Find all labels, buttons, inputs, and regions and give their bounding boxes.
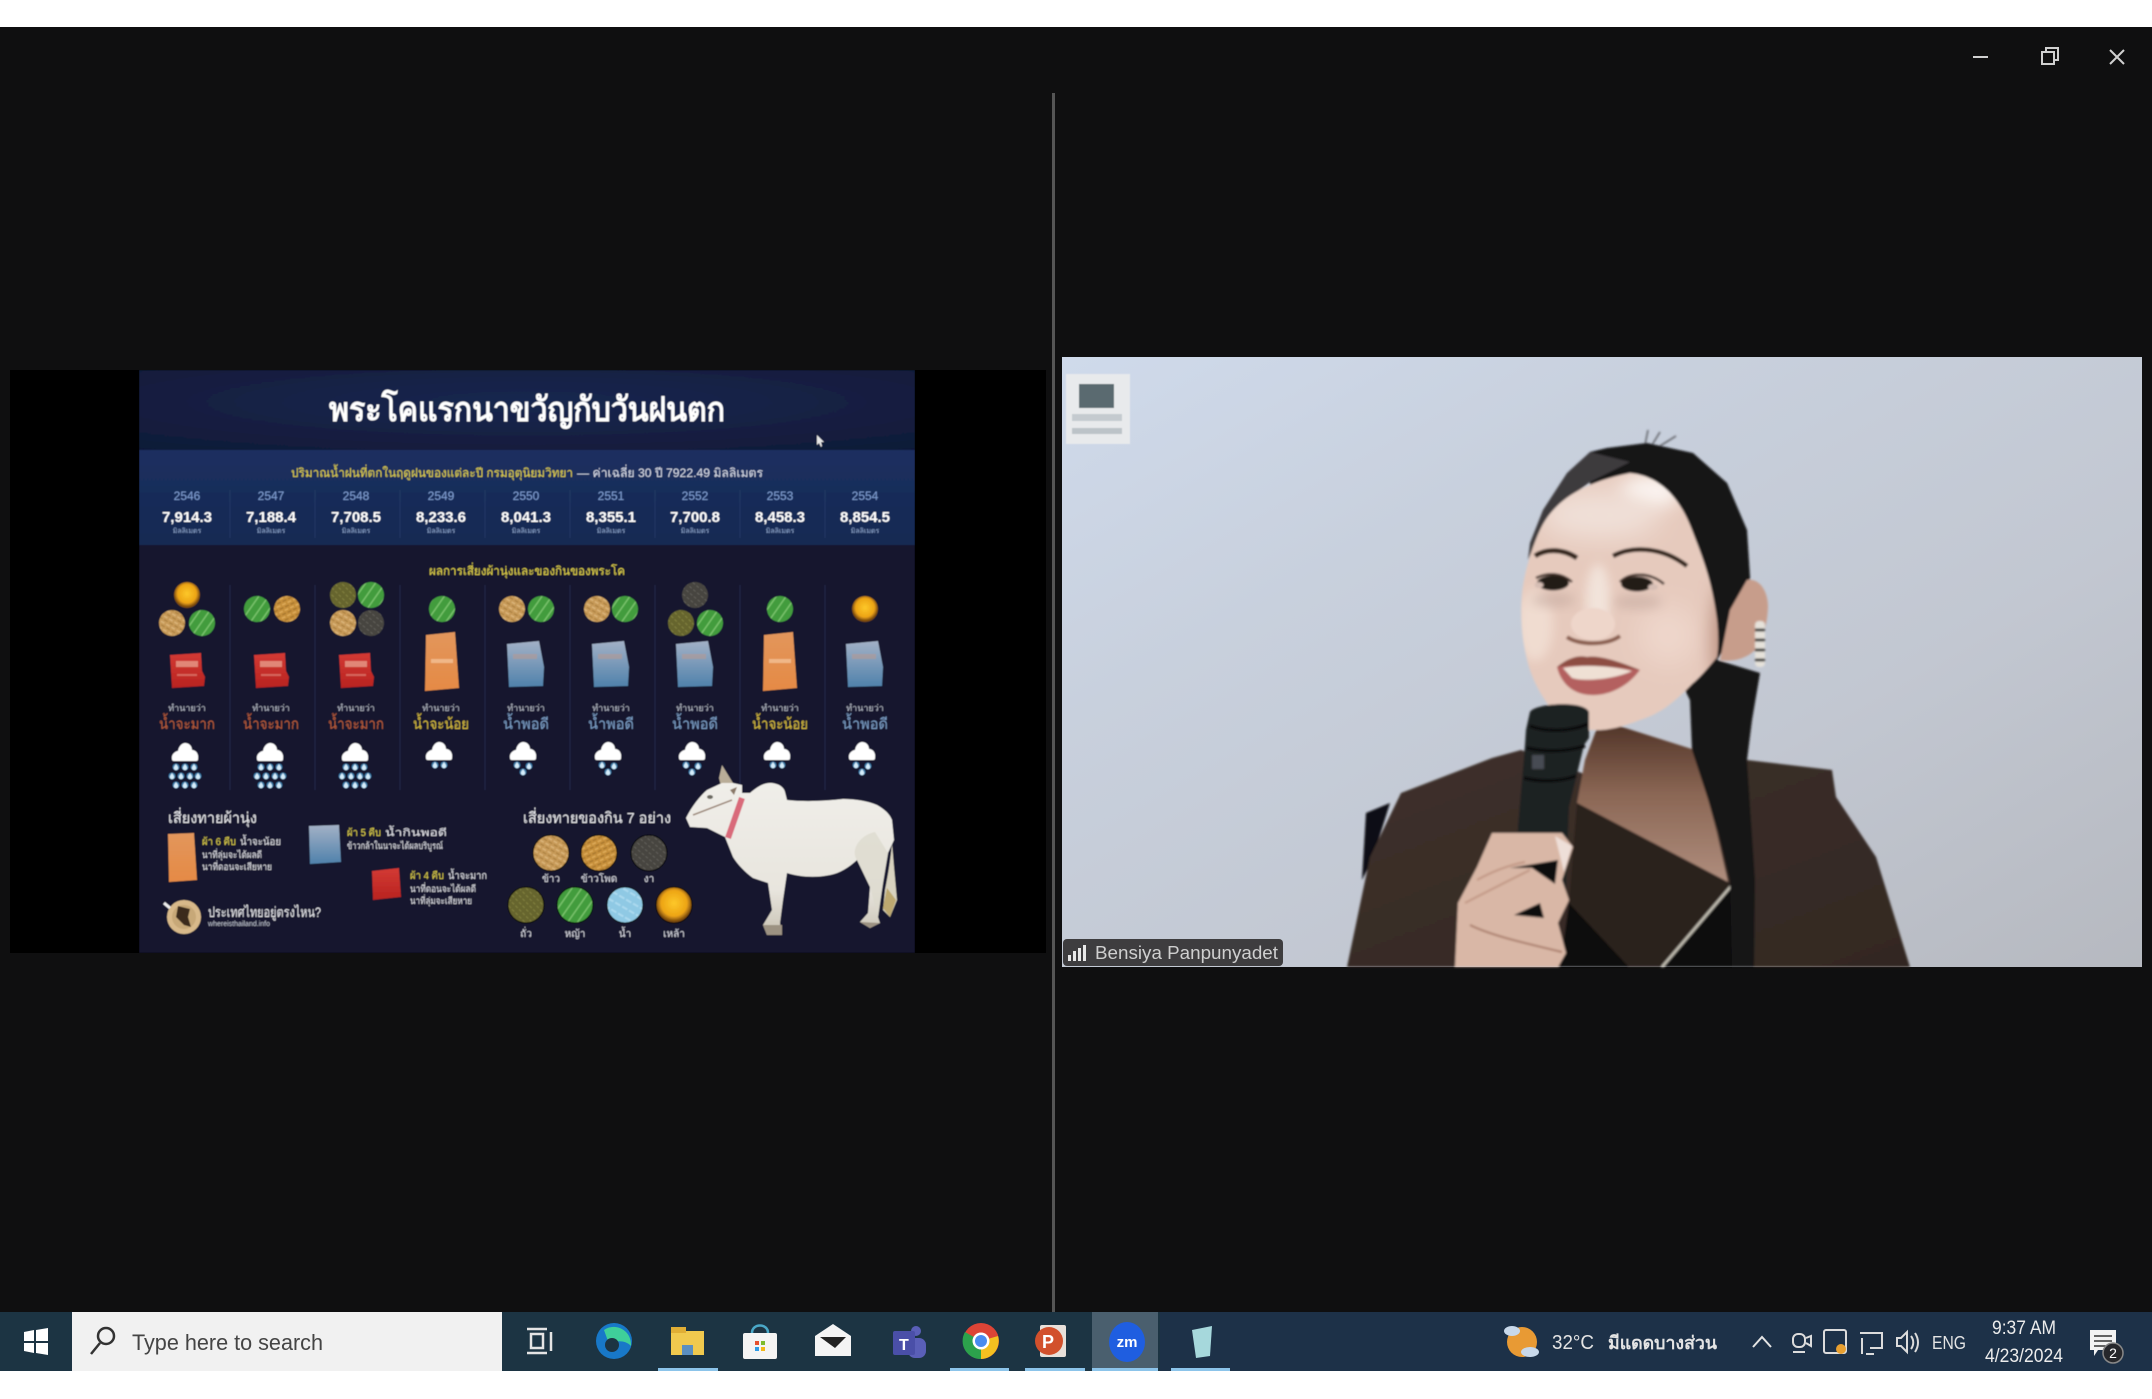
title: พระโคแรกนาขวัญกับวันฝนตก <box>329 389 725 430</box>
2547 foods <box>244 596 300 622</box>
search icon <box>91 1328 114 1354</box>
cloth legend heading: เสี่ยงทายผ้านุ่ง <box>168 807 257 828</box>
signal bars icon <box>1068 945 1086 961</box>
rainfall values row: 8,233.6 <box>416 509 466 526</box>
food legend <box>508 807 692 940</box>
food labels: น้ำ <box>619 926 631 940</box>
shared slide black letterbox <box>10 370 1046 953</box>
2548 foods <box>330 582 384 636</box>
rainfall values row: 8,854.5 <box>840 509 890 526</box>
panel: infographic slide <box>139 370 915 953</box>
food labels: หญ้า <box>565 928 585 940</box>
prediction caption row <box>168 703 884 713</box>
mouth <box>1557 656 1640 695</box>
chrome icon <box>963 1323 999 1359</box>
cloth icons row <box>170 632 883 691</box>
rainfall values row: 8,458.3 <box>755 509 805 526</box>
years row: 2548 <box>343 489 370 503</box>
store icon <box>743 1326 777 1359</box>
running app underlines <box>658 1368 1230 1371</box>
windows taskbar <box>0 1312 2152 1371</box>
legend cloth 6 <box>168 833 281 882</box>
2551 foods <box>584 596 638 622</box>
prediction result row: น้ำพอดี <box>503 713 549 733</box>
yearly rainfall table <box>162 489 890 535</box>
legend cloth 6: น้ำจะน้อย <box>240 834 281 848</box>
unit row: มิลลิเมตร <box>173 527 201 535</box>
hair top and ponytail <box>1590 443 1760 967</box>
rainfall values row: 8,355.1 <box>586 509 636 526</box>
heavy rain 2547 <box>254 743 286 788</box>
unit row: มิลลิเมตร <box>766 527 794 535</box>
centre divider <box>1052 93 1055 1312</box>
zoom icon: zm <box>1117 1334 1137 1351</box>
prediction result row: น้ำจะมาก <box>328 713 384 733</box>
prediction caption row: ทำนายว่า <box>252 703 290 713</box>
taskbar background <box>0 1312 2152 1371</box>
start button <box>24 1328 48 1355</box>
woman presenter <box>1347 430 1910 967</box>
prediction result row: น้ำจะน้อย <box>752 713 808 733</box>
years row: 2551 <box>598 489 625 503</box>
legend cloth 5 <box>309 825 447 864</box>
zoom active highlight <box>1092 1312 1158 1371</box>
logo url: whereisthailand.info <box>207 921 270 928</box>
panel: speaker video <box>1062 357 2142 967</box>
years row: 2552 <box>682 489 709 503</box>
logo: where is Thailand <box>164 900 321 934</box>
weather text: 32°C <box>1552 1332 1594 1354</box>
ear <box>1720 580 1768 661</box>
legend cloth 4: น้ำจะมาก <box>448 868 487 882</box>
2550 foods <box>499 596 554 622</box>
cloth legend <box>168 807 487 907</box>
results heading: ผลการเสี่ยงผ้านุ่งและของกินของพระโค <box>429 562 625 579</box>
2552 foods <box>668 582 723 636</box>
food labels: ข้าว <box>542 873 560 885</box>
unit row <box>173 527 879 535</box>
unit row: มิลลิเมตร <box>342 527 370 535</box>
years row: 2554 <box>852 489 879 503</box>
food labels: เหล้า <box>663 928 685 940</box>
zipper <box>1662 885 1732 967</box>
participant name: Bensiya Panpunyadet <box>1095 943 1278 963</box>
food labels: งา <box>644 874 654 885</box>
food legend heading: เสี่ยงทายของกิน 7 อย่าง <box>523 807 671 827</box>
unit row: มิลลิเมตร <box>427 527 455 535</box>
rainfall values row: 7,700.8 <box>670 509 720 526</box>
years row: 2549 <box>428 489 455 503</box>
unit row: มิลลิเมตร <box>681 527 709 535</box>
legend cloth 4: ผ้า 4 คืบ <box>410 870 444 882</box>
rainfall subtitle: ปริมาณน้ำฝนที่ตกในฤดูฝนของแต่ละปี กรมอุตุนิยมวิทยา <box>291 464 573 481</box>
prediction caption row: ทำนายว่า <box>761 703 799 713</box>
legend cloth 6: นาที่ดอนจะเสียหาย <box>202 860 272 873</box>
2554 foods <box>852 596 878 622</box>
sheer left fringe <box>1528 452 1630 560</box>
prediction result row: น้ำพอดี <box>842 713 888 733</box>
wall background <box>1062 357 2142 967</box>
rain icons row <box>169 742 875 788</box>
prediction result row: น้ำจะมาก <box>159 713 215 733</box>
prediction result row: น้ำจะมาก <box>243 713 299 733</box>
prediction caption row: ทำนายว่า <box>592 703 630 713</box>
nose <box>1567 608 1620 643</box>
earring <box>1755 621 1765 667</box>
light rain 2553 <box>764 742 790 768</box>
moderate rain 2552 <box>679 742 705 775</box>
food coins <box>508 835 692 923</box>
food labels: ถั่ว <box>520 926 532 940</box>
dress <box>1347 750 1910 967</box>
dark underlayer <box>1560 885 1732 967</box>
moderate rain 2550 <box>510 742 536 775</box>
prediction caption row: ทำนายว่า <box>337 703 375 713</box>
mouse cursor <box>817 435 824 447</box>
slide background <box>139 370 915 953</box>
crystal app icon <box>1192 1326 1212 1358</box>
eyebrows <box>1535 550 1687 566</box>
legend cloth 4 <box>372 868 487 907</box>
weather description: มีแดดบางส่วน <box>1608 1333 1718 1353</box>
prediction result row: น้ำพอดี <box>588 713 634 733</box>
prediction result row <box>159 713 888 733</box>
weather icon <box>1504 1326 1539 1357</box>
legend cloth 6: นาที่ลุ่มจะได้ผลดี <box>202 848 262 861</box>
legend cloth 4: นาที่ลุ่มจะเสียหาย <box>410 894 472 907</box>
light rain 2549 <box>426 742 452 768</box>
food coin rows <box>159 582 878 636</box>
prediction result row: น้ำจะน้อย <box>413 713 469 733</box>
heavy rain 2546 <box>169 743 201 788</box>
powerpoint icon <box>1035 1325 1066 1357</box>
unit row: มิลลิเมตร <box>257 527 285 535</box>
language indicator: ENG <box>1932 1333 1966 1353</box>
unit row: มิลลิเมตร <box>512 527 540 535</box>
rainfall values row <box>162 509 890 526</box>
moderate rain 2551 <box>595 742 621 775</box>
notification icon: 2 <box>2109 1345 2117 1361</box>
prediction caption row: ทำนายว่า <box>507 703 545 713</box>
file explorer icon <box>671 1327 704 1355</box>
2549 foods <box>429 596 455 622</box>
hand <box>1455 833 1573 967</box>
legend cloth 5: น้ำกินพอดี <box>385 825 447 839</box>
prediction caption row: ทำนายว่า <box>846 703 884 713</box>
teams icon <box>893 1326 926 1358</box>
rainfall values row: 7,708.5 <box>331 509 381 526</box>
microphone <box>1516 704 1589 905</box>
search box <box>72 1312 502 1371</box>
clock: 9:37 AM <box>1992 1318 2056 1339</box>
clock: 4/23/2024 <box>1985 1346 2063 1367</box>
logo icon <box>164 900 201 934</box>
rainfall subtitle: — ค่าเฉลี่ย 30 ปี 7922.49 มิลลิเมตร <box>577 464 764 480</box>
2553 foods <box>767 596 793 622</box>
years row: 2553 <box>767 489 794 503</box>
window controls <box>1973 48 2124 64</box>
neck and chest <box>1577 720 1728 882</box>
notification icon <box>2090 1330 2123 1363</box>
task view icon <box>527 1329 551 1353</box>
heavy rain 2548 <box>339 743 371 788</box>
zoom icon <box>1109 1322 1145 1362</box>
legend cloth 4: นาที่ดอนจะได้ผลดี <box>410 882 476 895</box>
stray hair <box>1645 430 1676 446</box>
participant name tag <box>1063 939 1283 966</box>
rainfall values row: 7,914.3 <box>162 509 212 526</box>
chair back <box>1362 803 1390 880</box>
face <box>1520 470 1720 732</box>
name tag background <box>1063 939 1283 966</box>
legend cloth 5: ข้าวกล้าในนาจะได้ผลบริบูรณ์ <box>347 840 443 852</box>
legend cloth 6: ผ้า 6 คืบ <box>202 836 236 848</box>
unit row: มิลลิเมตร <box>851 527 879 535</box>
rainfall subtitle <box>291 464 764 481</box>
tray chevron <box>1753 1337 1771 1347</box>
prediction caption row: ทำนายว่า <box>422 703 460 713</box>
dress flap <box>1569 803 1732 967</box>
mail icon <box>815 1324 851 1356</box>
air conditioner controller <box>1066 374 1130 444</box>
clock <box>1985 1318 2063 1367</box>
years row: 2547 <box>258 489 285 503</box>
rainfall values row: 7,188.4 <box>246 509 297 526</box>
prediction caption row: ทำนายว่า <box>168 703 206 713</box>
years row <box>174 489 879 503</box>
years row: 2546 <box>174 489 201 503</box>
years row: 2550 <box>513 489 540 503</box>
moderate rain 2554 <box>849 742 875 775</box>
legend cloth 5: ผ้า 5 คืบ <box>347 827 381 839</box>
eyes <box>1534 574 1664 592</box>
unit row: มิลลิเมตร <box>597 527 625 535</box>
teams icon: T <box>899 1337 909 1354</box>
edge icon <box>596 1323 632 1359</box>
food labels <box>520 872 685 940</box>
food labels: ข้าวโพด <box>581 872 617 885</box>
royal ox illustration <box>686 765 897 935</box>
search placeholder: Type here to search <box>132 1330 323 1355</box>
tray icons <box>1793 1330 1918 1354</box>
powerpoint icon: P <box>1042 1332 1054 1352</box>
logo text: ประเทศไทยอยู่ตรงไหน? <box>208 904 321 921</box>
2546 foods <box>159 582 215 636</box>
rainfall values row: 8,041.3 <box>501 509 551 526</box>
prediction caption row: ทำนายว่า <box>676 703 714 713</box>
prediction result row: น้ำพอดี <box>672 713 718 733</box>
